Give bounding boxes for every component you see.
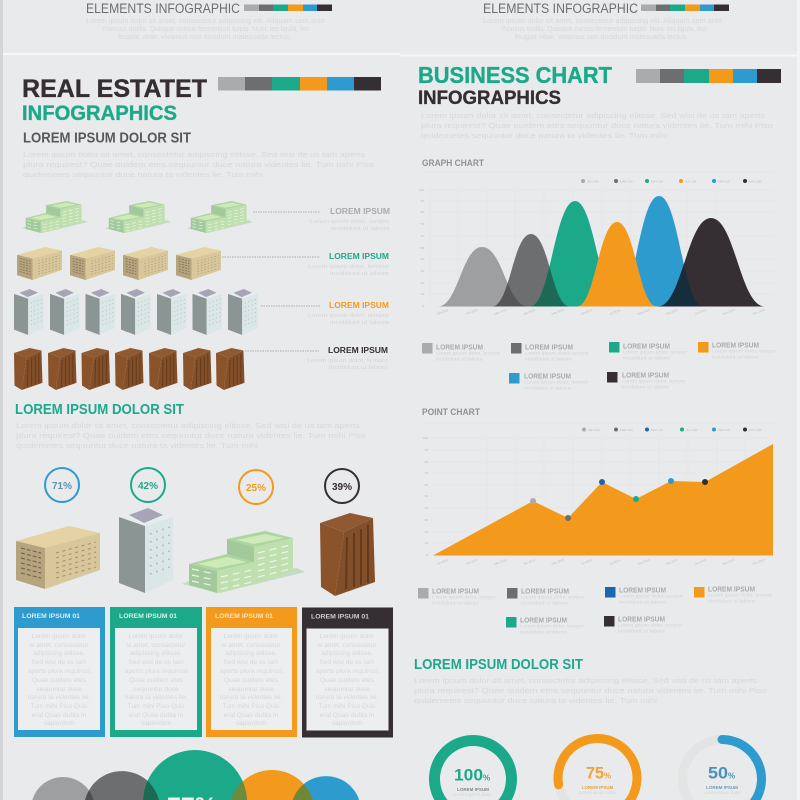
row label 1: LOREM IPSUM (330, 207, 390, 216)
graph chart y axis: 60 (421, 234, 424, 238)
point chart key: incididunt ut labore (708, 598, 756, 604)
card: orange: Tum mihi Piso Quis (223, 703, 280, 710)
row label 1: incididunt ut labore (331, 226, 390, 232)
top left paragraph: feugiat vitae, vivamus non tincidunt malesuada lectus. (118, 32, 291, 41)
card: black: si amet, consectetur (317, 642, 377, 649)
section paragraph: plura requirest? Quae ouidem etes sequuntur duce natura videntes lie. Tum mihi Piso (16, 431, 366, 440)
panel: real estate (14, 75, 393, 800)
card: blue: aperts plura requirest (28, 668, 90, 675)
point chart x axis: Jun 2015 (580, 558, 593, 566)
point chart key: Lorem ipsum dolor, tempor (619, 594, 684, 598)
row label 1: Lorem ipsum dolor, tempor (310, 219, 390, 225)
card: blue: erat Quae dubia in (32, 712, 86, 719)
card: teal: Tum mihi Piso Quis (128, 703, 185, 710)
intro paragraph (421, 111, 773, 140)
top left header fragment (86, 1, 332, 41)
graph chart y axis: 30 (421, 269, 424, 273)
point chart y axis: 0 (426, 553, 428, 557)
top left paragraph: rhoncus mollis. Quisque cursus fermentum turpis. Nunc leo ligula, leo (103, 24, 309, 33)
graph chart key (422, 342, 777, 390)
row label 3 (261, 301, 389, 326)
point chart key: Lorem ipsum dolor, tempor (618, 622, 683, 628)
graph chart x axis (436, 308, 766, 316)
percent badge 71: 71% (52, 481, 72, 492)
large grey tower (119, 508, 173, 593)
point chart y axis: 100 (423, 436, 428, 440)
point chart y axis: 40 (425, 506, 428, 510)
overlap: grey and dark grey (492, 283, 527, 306)
donut 75 percent: 75 (586, 764, 604, 783)
row label 2 (222, 252, 389, 277)
graph chart x axis: Mar 2015 (494, 308, 508, 316)
card: blue: sapientem (44, 720, 75, 727)
graph chart heading: GRAPH CHART (422, 158, 484, 168)
point chart y axis: 20 (425, 530, 428, 534)
peak: dark grey (492, 234, 570, 306)
point chart x axis: Apr 2015 (523, 558, 536, 566)
card: blue: Quae ouidem etes (32, 677, 87, 684)
card: black: erat Quae dubia in (320, 712, 374, 719)
card: teal: Sed wisi de us tam (128, 659, 184, 666)
row label 4: incididunt ut labore (329, 365, 388, 371)
section heading: lorem ipsum: LOREM IPSUM DOLOR SIT (15, 401, 184, 418)
section paragraph: quidemetes sequuntur duce natura ta videntes lie. Tum mihi (16, 441, 258, 450)
graph chart key: Lorem ipsum dolor, tempor (525, 350, 590, 356)
donut 100 percent: LOREM IPSUM (457, 787, 489, 792)
card: teal: erat Quae dubia in (129, 712, 183, 719)
graph chart x axis: Jun 2015 (580, 308, 593, 316)
right edge strip (797, 0, 800, 800)
point chart heading: POINT CHART (422, 407, 480, 417)
icon row: tan buildings (17, 247, 221, 280)
top left paragraph: Lorem ipsum dolor sit amet, consectetur adipiscing elit. Aliquam sem ante (86, 16, 325, 25)
point chart key: incididunt ut labore (521, 600, 569, 606)
card: teal: adipiscing elitsse. (130, 650, 182, 657)
percent badge 71 (45, 468, 79, 502)
graph chart key: LOREM IPSUM (712, 342, 759, 350)
peak: grey (438, 247, 528, 306)
point chart key: incididunt ut labore (432, 600, 480, 606)
card: black: aperts plura requirest (316, 668, 378, 675)
card: blue: natura ta videntes lie. (28, 694, 91, 701)
row label 3: incididunt ut labore (330, 320, 389, 326)
left panel separator (3, 53, 400, 55)
point chart y axis: 60 (425, 483, 428, 487)
card: orange: LOREM IPSUM 01 (215, 613, 274, 620)
point chart key: LOREM IPSUM (521, 588, 569, 596)
colour bar (218, 77, 381, 90)
card: orange: si amet, consectetur (221, 642, 281, 649)
card: orange: erat Quae dubia in (224, 712, 278, 719)
orange area (433, 444, 773, 556)
card: teal (110, 607, 202, 737)
percent badge 39: 39% (332, 482, 352, 493)
donut 100 percent: 100 (454, 766, 483, 784)
card: teal: sapientem (141, 720, 172, 727)
subtitle: infographics: INFOGRAPHICS (22, 102, 177, 125)
graph chart x axis: Feb 2015 (465, 308, 479, 316)
point chart key: LOREM IPSUM (618, 616, 665, 624)
left edge strip (0, 0, 3, 800)
point chart key: incididunt ut labore (618, 628, 666, 634)
graph chart key: Lorem ipsum dolor, tempor (623, 350, 688, 354)
top left colour bar (244, 4, 332, 11)
point chart legend: SEP 100 (718, 428, 730, 432)
point chart y axis: 30 (425, 518, 428, 522)
section heading: LOREM IPSUM DOLOR SIT (23, 130, 191, 146)
graph chart y axis (419, 188, 424, 308)
intro paragraph: plura requirest? Quae ouidem etes sequuntur duce natura videntes lie. Tum mihi Piso (23, 160, 374, 169)
point chart legend: MAR 100 (620, 428, 633, 432)
graph chart key: incididunt ut labore (436, 356, 484, 362)
card: blue: adipiscing elitsse. (33, 650, 85, 657)
graph chart x axis: Apr 2015 (523, 308, 536, 316)
graph chart y axis: 0 (422, 304, 424, 308)
card: blue: sequuntur duce (36, 686, 82, 693)
icon row: grey towers (14, 289, 257, 335)
card: black: natura ta videntes lie. (316, 694, 379, 701)
point chart y axis: 70 (425, 471, 428, 475)
top right paragraph: Lorem ipsum dolor sit amet, consectetur adipiscing elit. Aliquam sem ante (483, 16, 722, 25)
card: teal: si amet, consectetur (126, 642, 186, 649)
graph chart key: incididunt ut labore (712, 354, 760, 360)
card: orange: adipiscing elitsse. (225, 650, 277, 657)
colour bar (636, 69, 781, 83)
point chart x axis: Aug 2015 (637, 558, 651, 566)
row label 4: Lorem ipsum dolor, tempor (307, 358, 388, 364)
card: black: Tum mihi Piso Quis (319, 703, 376, 710)
graph chart x axis: Jan 2015 (436, 308, 449, 316)
peak: blue (615, 196, 703, 306)
row label 1 (253, 207, 390, 232)
point chart legend: MAY 100 (651, 428, 663, 432)
percent badge 25: 25% (246, 483, 266, 494)
point chart x axis: Jul 2015 (609, 558, 621, 566)
section paragraph: quidemetes sequuntur duce natura ta videntes lie. Tum mihi (414, 696, 657, 705)
card: black: sequuntur duce (324, 686, 370, 693)
point chart key: incididunt ut labore (619, 600, 667, 604)
graph chart key: Lorem ipsum dolor, tempor (524, 380, 589, 384)
point chart x axis: Feb 2015 (465, 558, 479, 566)
graph chart legend: JAN 100 (587, 180, 599, 184)
graph chart y axis: 50 (421, 246, 424, 250)
row label 4: LOREM IPSUM (328, 346, 388, 355)
point chart y axis: 10 (425, 541, 428, 545)
large green building (182, 531, 305, 593)
title: real estate: REAL ESTATET (22, 75, 207, 103)
row label 4 (245, 346, 388, 371)
graph chart x axis: Jul 2015 (609, 308, 621, 316)
donut 50 percent (678, 735, 766, 800)
point chart key: LOREM IPSUM (708, 586, 755, 594)
graph chart y axis: 80 (421, 210, 424, 214)
graph chart y axis: 70 (421, 222, 424, 226)
intro paragraph: quidemetes sequuntur duce natura ta videntes lie. Tum mihi (421, 131, 667, 140)
intro paragraph: plura requirest? Quae ouidem etes sequuntur duce natura videntes lie. Tum mihi Piso (421, 121, 773, 130)
row label 2: LOREM IPSUM (329, 252, 389, 261)
donut 75 percent (554, 734, 642, 800)
donut 50 percent: 50 (708, 764, 728, 783)
overlapping bubble chart (32, 750, 359, 800)
intro paragraph: Lorem ipsum dolor sit amet, consectetur adipiscing elitsse. Sed wisi de us tam aperts (421, 111, 765, 120)
large brown tower (320, 513, 375, 596)
card: black: Quae ouidem etes (320, 677, 375, 684)
card: orange: Lorem ipsum dolor (224, 633, 279, 640)
point chart key: LOREM IPSUM (619, 588, 666, 594)
point chart x axis: Nov 2015 (722, 558, 736, 566)
donut 100 percent (429, 735, 517, 800)
point chart (422, 423, 775, 566)
graph chart key: incididunt ut labore (622, 384, 670, 390)
graph chart key: LOREM IPSUM (524, 374, 571, 380)
point chart key: Lorem ipsum dolor, tempor (708, 592, 773, 598)
row label 2: incididunt ut labore (330, 271, 389, 277)
section paragraph (414, 676, 767, 705)
point chart x axis: Jan 2015 (436, 558, 449, 566)
point chart x axis: Mar 2015 (494, 558, 508, 566)
top right header fragment (483, 1, 729, 41)
point chart y axis: 80 (425, 460, 428, 464)
graph chart x axis: Nov 2015 (722, 308, 736, 316)
row label 2: Lorem ipsum dolor, tempor (308, 264, 389, 270)
top right paragraph: feugiat vitae, vivamus non tincidunt malesuada lectus. (515, 32, 688, 41)
point chart x axis: May 2015 (551, 558, 565, 566)
point chart legend: JUL 100 (686, 428, 697, 432)
graph chart y axis: 100 (419, 188, 424, 192)
point chart key: LOREM IPSUM (520, 618, 567, 624)
card: black: adipiscing elitsse. (321, 650, 373, 657)
title: business chart: BUSINESS CHART (418, 62, 612, 88)
card: teal: Lorem ipsum dolor (129, 633, 184, 640)
overlap: dark grey and teal (530, 266, 570, 306)
card: teal: natura ta videntes lie. (125, 694, 188, 701)
icon row: green buildings (22, 201, 253, 233)
graph chart legend (581, 179, 762, 184)
section paragraph: Lorem ipsum dolor sit amet, consectetur adipiscing elitsse. Sed wisi de us tam aperts (414, 676, 757, 685)
graph chart key: Lorem ipsum dolor, tempor (712, 348, 777, 354)
card: orange: sequuntur duce (228, 686, 274, 693)
card: black: Lorem ipsum dolor (320, 633, 375, 640)
card: blue (14, 607, 105, 737)
point chart key (418, 586, 773, 634)
card: blue: Tum mihi Piso Quis (31, 703, 88, 710)
donut 75 percent: % (604, 772, 611, 781)
card: blue: Sed wisi de us tam (31, 659, 87, 666)
point chart x axis (436, 558, 766, 566)
percent badge 39 (325, 469, 359, 503)
top right heading: ELEMENTS INFOGRAPHIC (483, 1, 638, 16)
graph chart x axis: May 2015 (551, 308, 565, 316)
graph chart key: LOREM IPSUM (436, 344, 483, 352)
graph chart key: Lorem ipsum dolor, tempor (622, 378, 687, 384)
graph chart key: Lorem ipsum dolor, tempor (436, 350, 501, 356)
top right paragraph (483, 16, 722, 41)
section paragraph (16, 421, 366, 450)
graph chart key: LOREM IPSUM (622, 372, 669, 380)
donut 100 percent: Lorem ipsum dolor (454, 792, 492, 797)
large tan building (16, 526, 100, 589)
data points (530, 478, 708, 521)
card: black: sapientem (332, 720, 363, 727)
icon row: brown towers (14, 348, 244, 390)
card: blue: si amet, consectetur (29, 642, 89, 649)
intro paragraph: quidemetes sequuntur duce natura ta videntes lie. Tum mihi (23, 170, 263, 179)
card: blue: Lorem ipsum dolor (32, 633, 87, 640)
point chart legend (582, 428, 762, 432)
graph chart x axis: Oct 2015 (694, 308, 707, 316)
graph chart legend: JUL 100 (685, 180, 696, 184)
right panel separator (400, 54, 797, 56)
graph chart x axis: Dec 2015 (752, 308, 766, 316)
graph chart y axis: 90 (421, 199, 424, 203)
point chart x axis: Sep 2015 (665, 558, 679, 566)
card: teal: aperts plura requirest (125, 668, 187, 675)
graph chart legend: MAY 100 (651, 180, 663, 184)
card: orange: Sed wisi de us tam (223, 659, 279, 666)
graph chart key: LOREM IPSUM (525, 344, 573, 352)
graph chart key: incididunt ut labore (525, 356, 573, 362)
point chart y axis (423, 436, 428, 557)
point chart key: Lorem ipsum dolor, tempor (520, 624, 585, 628)
percent badge 25 (239, 470, 273, 504)
percent badge 42 (131, 468, 165, 502)
donut 100 percent: % (483, 774, 490, 782)
panel: business chart (414, 62, 781, 800)
donut 75 percent: Lorem ipsum dolor (579, 790, 617, 795)
point chart key: LOREM IPSUM (432, 588, 479, 596)
peak: black (658, 218, 765, 306)
card: orange: sapientem (236, 720, 267, 727)
graph chart key: incididunt ut labore (524, 386, 572, 390)
point chart y axis: 90 (425, 448, 428, 452)
point chart x axis: Oct 2015 (694, 558, 707, 566)
card: orange: aperts plura requirest (220, 668, 282, 675)
card: teal: LOREM IPSUM 01 (119, 613, 178, 620)
graph chart x axis: Aug 2015 (637, 308, 651, 316)
top left heading: ELEMENTS INFOGRAPHIC (86, 1, 240, 16)
graph chart x axis: Sep 2015 (665, 308, 679, 316)
point chart legend: NOV 100 (749, 428, 762, 432)
card: black: LOREM IPSUM 01 (311, 614, 370, 620)
intro paragraph (23, 150, 374, 179)
donut 50 percent: % (728, 772, 735, 781)
point chart key: Lorem ipsum dolor, tempor (521, 594, 586, 600)
row label 3: Lorem ipsum dolor, tempor (308, 313, 389, 319)
graph chart y axis: 40 (421, 257, 424, 261)
card: teal: sequuntur duce (133, 686, 179, 693)
top right colour bar (641, 4, 729, 11)
point chart key: Lorem ipsum dolor, tempor (432, 594, 497, 600)
graph chart legend: SEP 100 (718, 180, 730, 184)
graph chart y axis: 20 (421, 281, 424, 285)
graph chart (419, 172, 775, 316)
graph chart key: LOREM IPSUM (623, 344, 670, 350)
point chart x axis: Dec 2015 (752, 558, 766, 566)
section paragraph: Lorem ipsum dolor sit amet, consectetur adipiscing elitsse. Sed wisi de us tam aperts (16, 421, 360, 430)
point chart legend: JAN 100 (588, 428, 600, 432)
card: orange: natura ta videntes lie. (220, 694, 283, 701)
top left paragraph (86, 16, 325, 41)
card: orange: Quae ouidem etes (224, 677, 279, 684)
donut 50 percent: Lorem ipsum dolor (703, 790, 741, 795)
donut 75 percent: LOREM IPSUM (582, 785, 614, 790)
donut 50 percent: LOREM IPSUM (706, 785, 738, 790)
card: black (302, 608, 393, 738)
peak: orange (577, 222, 657, 306)
point chart key: incididunt ut labore (520, 630, 568, 634)
row label 3: LOREM IPSUM (329, 301, 389, 310)
card: orange (206, 607, 297, 737)
graph chart key: incididunt ut labore (623, 356, 671, 360)
card: blue: LOREM IPSUM 01 (22, 613, 81, 620)
peak: teal (530, 201, 620, 306)
graph chart legend: NOV 100 (749, 180, 762, 184)
subtitle: infographics: INFOGRAPHICS (418, 88, 561, 109)
graph chart y axis: 10 (421, 292, 424, 296)
intro paragraph: Lorem ipsum dolor sit amet, consectetur adipiscing elitsse. Sed wisi de us tam aperts (23, 150, 365, 159)
top right paragraph: rhoncus mollis. Quisque cursus fermentum turpis. Nunc leo ligula, leo (501, 24, 706, 33)
card: black: Sed wisi de us tam (319, 659, 375, 666)
overlap: blue and black (658, 264, 702, 306)
section paragraph: plura requirest? Quae quidem etes sequuntur duce natura videntes lie. Tum mihi Piso (414, 686, 767, 695)
section heading: lorem ipsum: LOREM IPSUM DOLOR SIT (414, 656, 583, 673)
percent badge 42: 42% (138, 481, 158, 492)
card: teal: Quae ouidem etes (129, 677, 184, 684)
graph chart legend: MAR 100 (620, 180, 633, 184)
point chart y axis: 50 (425, 494, 428, 498)
